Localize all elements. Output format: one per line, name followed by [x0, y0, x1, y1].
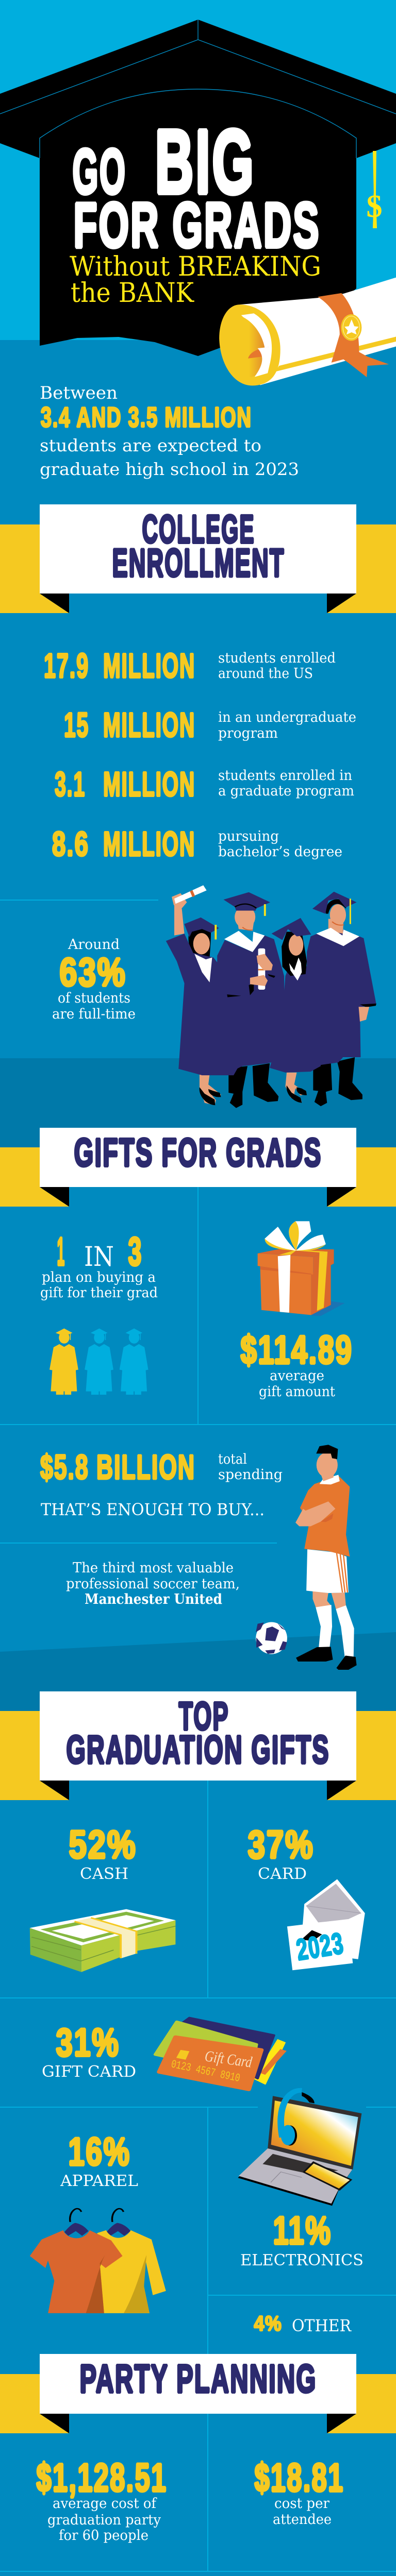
stat: card [248, 1823, 315, 1883]
header: graduation cap [0, 20, 396, 356]
stat: average gift amount: $114.89 [240, 1328, 353, 1372]
stat: apparel: APPAREL [60, 2172, 138, 2190]
stat: electronics: 11% [273, 2209, 332, 2252]
full-time stat [52, 937, 136, 1022]
stat: cash: 52% [69, 1823, 137, 1867]
enrollment stat: 8.6 million: 8.6 [52, 825, 89, 863]
illustration: four graduates [166, 885, 376, 1108]
icon: tassel with dollar sign [366, 151, 383, 228]
text: manchester united: The third most valuable [73, 1560, 234, 1576]
text: manchester united: professional soccer team, [66, 1576, 240, 1592]
stat: 1 in 3: plan on buying a [42, 1269, 156, 1285]
icon: stack of gift cards: Gift Card [204, 2047, 254, 2071]
stat: total spending: spending [218, 1467, 283, 1483]
stat: average gift amount: gift amount [259, 1384, 335, 1400]
enrollment stat: 3.1 million [55, 765, 354, 804]
enrollment stat: 17.9 million [44, 647, 336, 685]
enrollment stat: 8.6 million: bachelor’s degree [218, 844, 342, 860]
stat: electronics: ELECTRONICS [240, 2251, 364, 2269]
stat: gift card [42, 2021, 136, 2081]
stat: average gift amount [240, 1328, 353, 1400]
enrollment stat: 15 million: program [218, 725, 278, 741]
heading banner: gifts for grads [0, 1128, 396, 1207]
full-time stat: of students [58, 990, 130, 1006]
stat: average party cost [36, 2455, 167, 2544]
stat: gift card: GIFT CARD [42, 2063, 136, 2081]
stat: 1 in 3: 1 [57, 1229, 65, 1274]
divider with gap for laptop [0, 2107, 396, 2354]
title: the BANK [71, 278, 194, 309]
stat: apparel [60, 2130, 138, 2190]
title [70, 111, 321, 309]
stat: total spending: THAT’S ENOUGH TO BUY... [41, 1501, 265, 1519]
stat: cost per attendee: cost per [274, 2496, 329, 2512]
stat: other [254, 2311, 352, 2335]
enrollment stat: 8.6 million [52, 825, 342, 863]
heading banner: top graduation gifts [0, 1691, 396, 1800]
enrollment stat: 8.6 million: MILLION [103, 825, 195, 863]
heading banner: top graduation gifts: TOP [178, 1694, 229, 1738]
stat: total spending [40, 1448, 283, 1519]
intro text: graduate high school in 2023 [40, 459, 299, 479]
enrollment stat: 8.6 million: pursuing [218, 828, 279, 844]
enrollment stat: 15 million [64, 706, 356, 744]
stat: average gift amount: average [270, 1368, 324, 1384]
stat: average party cost: average cost of [53, 2496, 157, 2512]
icon: stack of gift cards: 0123 4567 8910 [170, 2058, 241, 2085]
heading banner: party planning [0, 2354, 396, 2433]
enrollment stat: 15 million: 15 [64, 706, 89, 744]
icon: rolled diploma [219, 278, 396, 386]
full-time stat: are full-time [52, 1006, 136, 1022]
enrollment stat: 17.9 million: 17.9 [44, 647, 89, 685]
stat: other: 4% [254, 2311, 283, 2335]
full-time stat: 63% [60, 950, 127, 994]
intro text [40, 383, 299, 479]
stat: total spending: total [218, 1451, 247, 1467]
intro text: Between [40, 383, 118, 403]
stat: average party cost: graduation party [47, 2512, 161, 2528]
icon: stack of cash [30, 1909, 175, 1972]
full-time stat: Around [68, 937, 120, 953]
enrollment stat: 3.1 million: a graduate program [218, 783, 354, 799]
enrollment stat: 3.1 million: students enrolled in [218, 768, 352, 784]
stat: apparel: 16% [68, 2130, 131, 2174]
illustration: soccer player and ball [256, 1445, 357, 1670]
icon: greeting card and envelope: 2023 [294, 1926, 346, 1967]
stat: card: 37% [248, 1823, 315, 1867]
icon: tassel with dollar sign: $ [366, 189, 383, 224]
stat: cash: CASH [80, 1865, 128, 1883]
icon: gift box [258, 1221, 345, 1316]
stat: cost per attendee [255, 2455, 344, 2528]
icon: greeting card and envelope [287, 1879, 365, 1970]
stat: card: CARD [258, 1865, 307, 1883]
icon: shirts on hangers [30, 2209, 166, 2313]
enrollment stat: 17.9 million: MILLION [103, 647, 195, 685]
stat: average party cost: for 60 people [59, 2528, 148, 2544]
stat: electronics [240, 2209, 364, 2269]
title: GO [72, 136, 127, 207]
stat: other: OTHER [292, 2317, 352, 2335]
text: manchester united: Manchester United [85, 1591, 222, 1607]
stat: 1 in 3 [40, 1229, 158, 1301]
enrollment stat: 3.1 million: 3.1 [55, 765, 86, 804]
icon: stack of gift cards [155, 2018, 287, 2090]
intro text: students are expected to [40, 435, 261, 455]
stat: cash [69, 1823, 137, 1883]
icon: three graduate silhouettes [50, 1329, 148, 1395]
enrollment stat: 17.9 million: students enrolled [218, 650, 336, 666]
stat: 1 in 3: IN [84, 1242, 114, 1273]
stat: 1 in 3: 3 [128, 1229, 142, 1274]
stat: 1 in 3: gift for their grad [40, 1285, 158, 1301]
title: Without BREAKING [70, 251, 321, 282]
heading banner: college enrollment [0, 504, 396, 613]
intro text: 3.4 AND 3.5 MILLION [41, 401, 252, 433]
title: BIG [155, 111, 256, 212]
stat: cost per attendee: attendee [273, 2512, 332, 2528]
stat: total spending: $5.8 BILLION [40, 1448, 195, 1487]
enrollment stat: 3.1 million: MILLION [103, 765, 195, 804]
stat: gift card: 31% [56, 2021, 120, 2065]
enrollment stat: 15 million: in an undergraduate [218, 709, 356, 725]
icon: laptop, phone and headphones [238, 2090, 361, 2206]
enrollment stat: 17.9 million: around the US [218, 666, 313, 682]
heading banner: college enrollment: COLLEGE [142, 507, 255, 551]
enrollment stat: 15 million: MILLION [103, 706, 195, 744]
stat: cost per attendee: $18.81 [255, 2455, 344, 2500]
text: manchester united [66, 1560, 240, 1607]
stat: average party cost: $1,128.51 [36, 2455, 167, 2500]
